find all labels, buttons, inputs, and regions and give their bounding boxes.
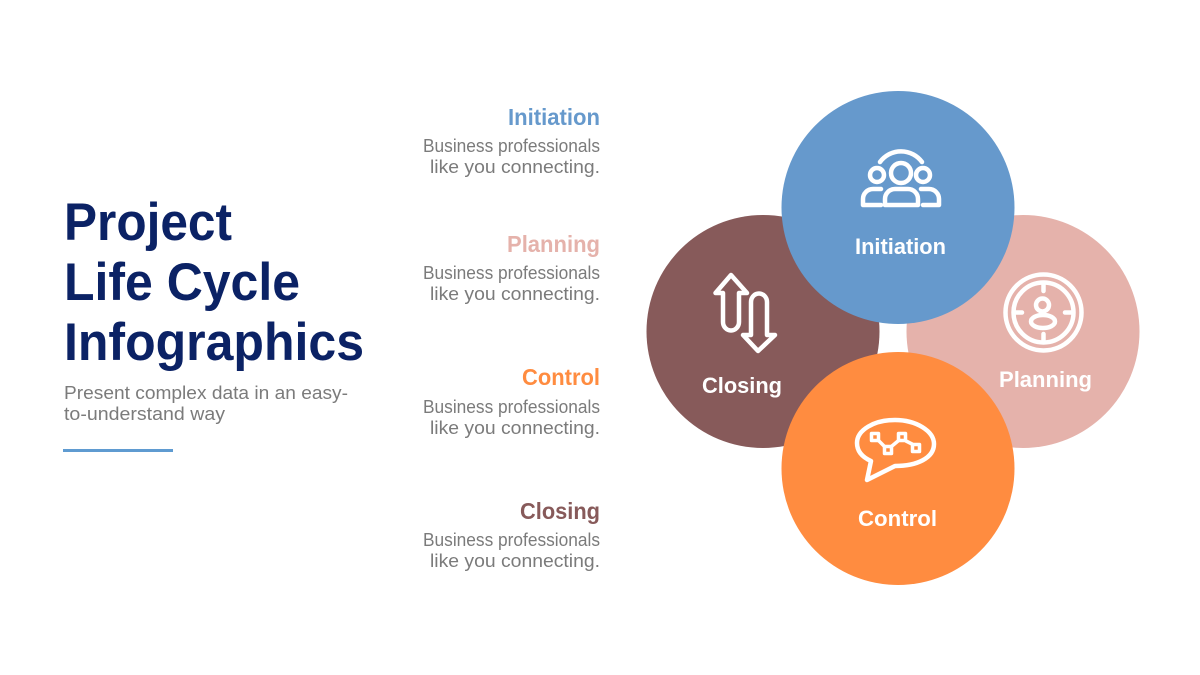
circle: Closing bbox=[646, 215, 880, 448]
icon: up and down arrows bbox=[716, 275, 775, 351]
text block: Closing: Business professionals bbox=[423, 530, 600, 550]
title: Life Cycle bbox=[64, 253, 300, 312]
subtitle: to-understand way bbox=[64, 403, 226, 424]
text block: Planning: like you connecting. bbox=[430, 283, 600, 304]
text block: Planning bbox=[423, 231, 600, 304]
text block: Control: like you connecting. bbox=[430, 417, 600, 438]
icon: target with person bbox=[1006, 274, 1082, 350]
title: Project bbox=[64, 193, 232, 252]
text block: Closing: like you connecting. bbox=[430, 550, 600, 571]
text block: Control bbox=[423, 364, 600, 438]
text block: Planning: Business professionals bbox=[423, 263, 600, 283]
text block: Initiation: like you connecting. bbox=[430, 156, 600, 177]
text block: Closing bbox=[423, 498, 600, 571]
text block: Initiation bbox=[423, 104, 600, 177]
icon: team of people bbox=[863, 151, 939, 205]
text block: Control: Business professionals bbox=[423, 397, 600, 417]
subtitle bbox=[64, 382, 348, 424]
title: Infographics bbox=[64, 313, 364, 372]
icon: speech bubble with data nodes bbox=[857, 420, 934, 480]
text block: Closing: Closing bbox=[520, 498, 600, 524]
label: Control: Control bbox=[858, 506, 937, 531]
text block: Initiation: Initiation bbox=[508, 104, 600, 130]
text block: Initiation: Business professionals bbox=[423, 136, 600, 156]
circle: Initiation bbox=[782, 91, 1014, 324]
circle: Planning bbox=[906, 215, 1140, 448]
circle: Control bbox=[782, 352, 1014, 585]
label: Closing: Closing bbox=[702, 373, 782, 398]
subtitle: Present complex data in an easy- bbox=[64, 382, 348, 403]
label: Planning: Planning bbox=[999, 367, 1092, 392]
title underline bbox=[63, 449, 173, 452]
label: Initiation: Initiation bbox=[855, 234, 946, 259]
text block: Control: Control bbox=[522, 364, 600, 390]
title bbox=[64, 193, 364, 372]
text block: Planning: Planning bbox=[507, 231, 600, 257]
